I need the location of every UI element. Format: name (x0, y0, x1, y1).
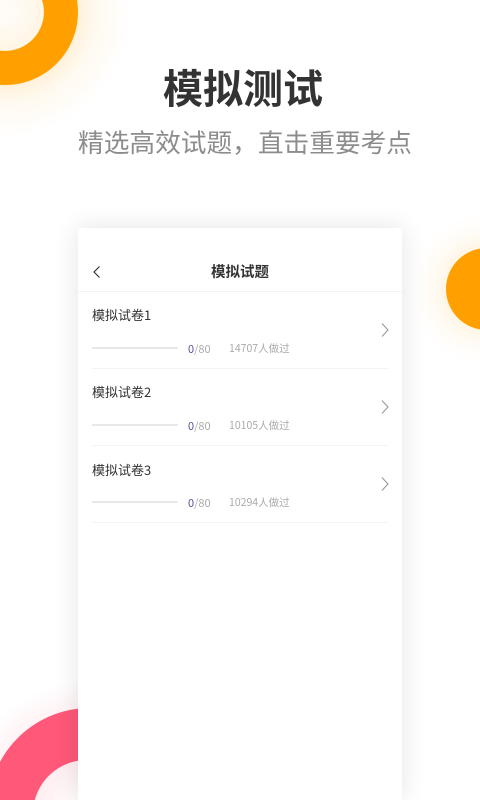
list item 3 (92, 464, 389, 523)
icon: chevron (382, 400, 389, 414)
score: 0/80 (188, 418, 211, 434)
attempts count: 14707人做过 (229, 341, 290, 356)
item divider (92, 522, 389, 523)
title: 模拟测试 (163, 57, 323, 115)
list item 2 (92, 386, 389, 446)
progress bar (92, 501, 178, 503)
item name: 模拟试卷3 (92, 460, 151, 479)
item name: 模拟试卷1 (92, 305, 151, 324)
panel: phone screen card (78, 228, 402, 800)
decoration: orange circle right (405, 205, 480, 373)
decoration: pink ring bottom-left (0, 670, 78, 800)
progress bar (92, 347, 178, 349)
decoration: orange ring top-left (0, 0, 140, 150)
nav divider (78, 291, 402, 292)
item divider (92, 368, 389, 369)
attempts count: 10294人做过 (229, 495, 290, 510)
score: 0/80 (188, 495, 211, 511)
icon: back arrow (93, 266, 100, 278)
attempts count: 10105人做过 (229, 418, 290, 433)
item divider (92, 445, 389, 446)
item name: 模拟试卷2 (92, 382, 151, 401)
nav title: 模拟试题 (211, 261, 269, 282)
icon: chevron (382, 477, 389, 491)
icon: chevron (382, 323, 389, 337)
list item 1 (92, 308, 389, 369)
score: 0/80 (188, 341, 211, 357)
progress bar (92, 424, 178, 426)
subtitle: 精选高效试题，直击重要考点 (78, 123, 412, 160)
